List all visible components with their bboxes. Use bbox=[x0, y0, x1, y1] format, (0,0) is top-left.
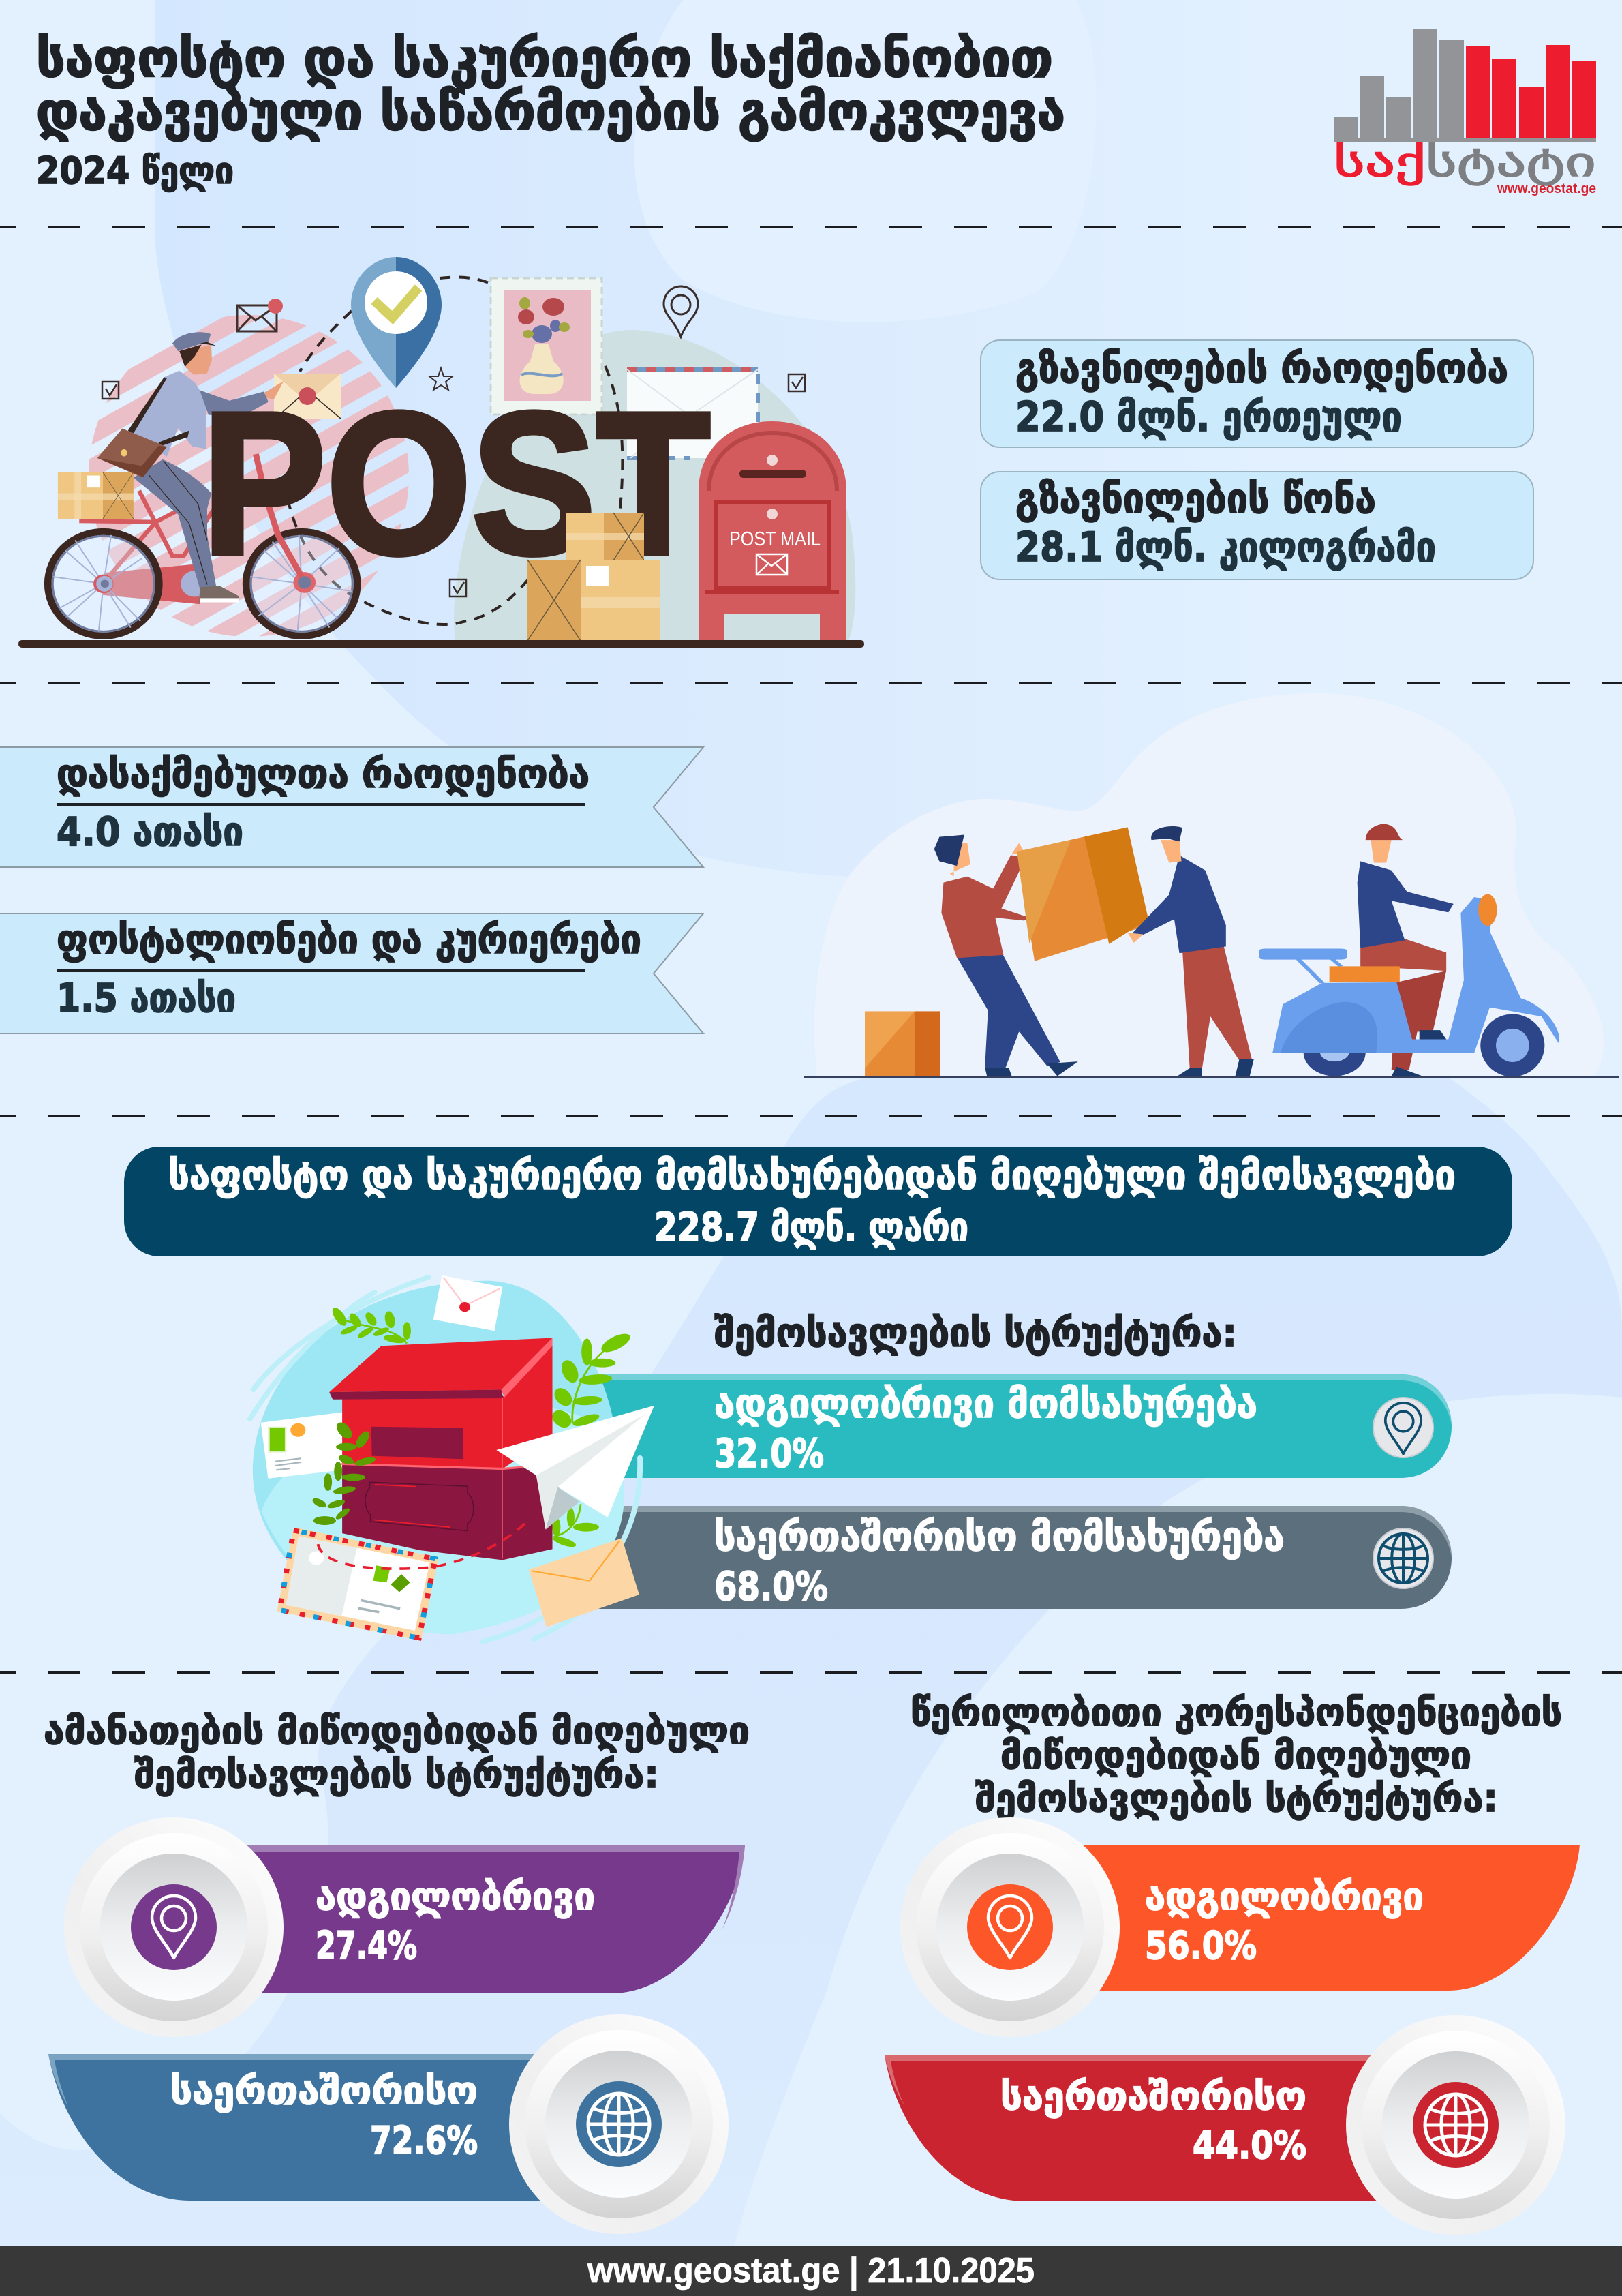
stat box: number of shipments: 22.0 მლნ. ერთეული bbox=[1015, 393, 1402, 441]
icon: pin disc bbox=[64, 1817, 284, 2037]
torso and arm bbox=[131, 371, 206, 457]
box on rack bbox=[58, 472, 134, 519]
bar: international services 68.0% bbox=[586, 1506, 1452, 1610]
stat box: weight of shipments: 28.1 მლნ. კილოგრამი bbox=[1015, 524, 1436, 571]
ribbon: postmen and couriers bbox=[0, 913, 703, 1033]
logo: geostat bbox=[1334, 29, 1596, 196]
icons: check boxes bbox=[102, 374, 805, 596]
stamp bbox=[491, 278, 602, 414]
carried box bbox=[1017, 827, 1148, 961]
title: დაკავებული საწარმოების გამოკვლევა bbox=[36, 81, 1065, 142]
POST lettering: POST bbox=[202, 370, 710, 596]
ribbon: employees: დასაქმებულთა რაოდენობა bbox=[57, 751, 590, 797]
icon: pin disc bbox=[900, 1817, 1120, 2037]
paper plane bbox=[496, 1406, 654, 1530]
icon: globe disc bbox=[509, 2014, 729, 2234]
postman on bicycle bbox=[48, 332, 357, 636]
heading: written correspondence revenue structure: წერილობითი კორესპონდენციების bbox=[911, 1691, 1562, 1735]
bar: local services 32.0% bbox=[586, 1374, 1452, 1478]
airmail envelope bbox=[627, 369, 758, 458]
panel: correspondence international 44.0% bbox=[885, 2015, 1565, 2235]
heading: written correspondence revenue structure: მიწოდებიდან მიღებული bbox=[1000, 1734, 1471, 1778]
banner: total revenue bbox=[124, 1147, 1512, 1256]
logo: geostat: www.geostat.ge bbox=[1497, 181, 1596, 196]
ribbon: employees: 4.0 ათასი bbox=[57, 809, 243, 855]
red mailbox bbox=[699, 421, 846, 641]
parcels bbox=[527, 513, 660, 641]
leaf sprig bbox=[311, 1420, 376, 1525]
postcard left bbox=[261, 1412, 353, 1479]
footer bbox=[0, 2246, 1622, 2296]
messenger bag bbox=[97, 429, 167, 477]
icon: location pin with check bbox=[351, 257, 442, 388]
parcel on floor bbox=[865, 1011, 940, 1076]
airmail letter bbox=[277, 1523, 525, 1641]
bar: local services 32.0%: ადგილობრივი მომსახურება bbox=[714, 1380, 1257, 1427]
heading: written correspondence revenue structure: შემოსავლების სტრუქტურა: bbox=[975, 1777, 1498, 1821]
bar: international services 68.0%: საერთაშორისო მომსახურება bbox=[714, 1513, 1285, 1560]
icon: globe disc bbox=[1346, 2015, 1565, 2235]
ribbon: postmen and couriers: ფოსტალიონები და კურიერები bbox=[57, 916, 641, 963]
ground line bbox=[18, 640, 864, 648]
title bbox=[36, 28, 1065, 192]
stat box: weight of shipments bbox=[981, 472, 1533, 579]
heading: parcels revenue structure: ამანათების მიწოდებიდან მიღებული bbox=[44, 1709, 750, 1753]
icon: star bbox=[429, 368, 453, 390]
head and cap bbox=[181, 344, 212, 374]
illustration: couriers with parcel and scooter bbox=[804, 693, 1619, 1078]
panel: correspondence international 44.0%: საერთაშორისო bbox=[1000, 2074, 1306, 2119]
stat box: weight of shipments: გზავნილების წონა bbox=[1015, 475, 1376, 523]
icon: location pin bbox=[1373, 1398, 1433, 1457]
panel: parcels international 72.6%: საერთაშორისო bbox=[170, 2069, 478, 2113]
worker in blue bbox=[1128, 826, 1254, 1076]
mailbox bbox=[329, 1338, 553, 1560]
panel: parcels international 72.6% bbox=[48, 2014, 729, 2234]
panel: parcels local 27.4% bbox=[64, 1817, 745, 2037]
icon: envelope notification bbox=[237, 299, 283, 331]
panel: parcels local 27.4%: ადგილობრივი bbox=[316, 1875, 595, 1919]
heading: revenue structure: შემოსავლების სტრუქტურა: bbox=[714, 1310, 1237, 1356]
banner: total revenue: საფოსტო და საკურიერო მომსახურებიდან მიღებული შემოსავლები bbox=[168, 1152, 1456, 1198]
panel: correspondence local 56.0%: 56.0% bbox=[1145, 1924, 1257, 1968]
title: საფოსტო და საკურიერო საქმიანობით bbox=[36, 28, 1053, 89]
banner: total revenue: 228.7 მლნ. ლარი bbox=[654, 1204, 968, 1250]
heading: parcels revenue structure bbox=[44, 1709, 750, 1797]
ground line bbox=[804, 1076, 1619, 1078]
panel: parcels local 27.4%: 27.4% bbox=[316, 1924, 417, 1968]
letter top bbox=[433, 1275, 502, 1331]
heading: parcels revenue structure: შემოსავლების სტრუქტურა: bbox=[134, 1753, 659, 1797]
leaves bbox=[330, 1305, 633, 1549]
bar: local services 32.0%: 32.0% bbox=[714, 1430, 824, 1477]
envelope bottom right bbox=[529, 1538, 639, 1627]
illustration: post cyclist bbox=[18, 257, 864, 648]
panel: parcels international 72.6%: 72.6% bbox=[370, 2119, 478, 2163]
panel: correspondence local 56.0% bbox=[900, 1817, 1580, 2037]
panel: correspondence local 56.0%: ადგილობრივი bbox=[1145, 1875, 1424, 1919]
wheels bbox=[48, 532, 357, 636]
stat box: number of shipments bbox=[981, 340, 1533, 447]
ribbon: employees bbox=[0, 747, 703, 867]
courier on scooter bbox=[1259, 824, 1559, 1076]
title: 2024 წელი bbox=[36, 149, 234, 192]
footer: www.geostat.ge | 21.10.2025 bbox=[587, 2251, 1035, 2291]
heading: written correspondence revenue structure bbox=[911, 1691, 1562, 1821]
stat box: number of shipments: გზავნილების რაოდენობა bbox=[1015, 345, 1508, 393]
frame bbox=[79, 491, 222, 584]
icon: globe bbox=[1373, 1528, 1433, 1588]
logo: geostat: საქ სტატი bbox=[1334, 139, 1596, 185]
worker in red bbox=[934, 835, 1078, 1076]
illustration: red mailbox with letters bbox=[250, 1275, 654, 1642]
ribbon: postmen and couriers: 1.5 ათასი bbox=[57, 975, 236, 1021]
icon: outlined pin bbox=[664, 286, 698, 337]
panel: correspondence international 44.0%: 44.0% bbox=[1193, 2124, 1306, 2168]
envelope with wax seal bbox=[274, 374, 341, 419]
pants bbox=[134, 459, 216, 590]
red mailbox: POST MAIL bbox=[729, 528, 821, 550]
bar: international services 68.0%: 68.0% bbox=[714, 1563, 828, 1610]
